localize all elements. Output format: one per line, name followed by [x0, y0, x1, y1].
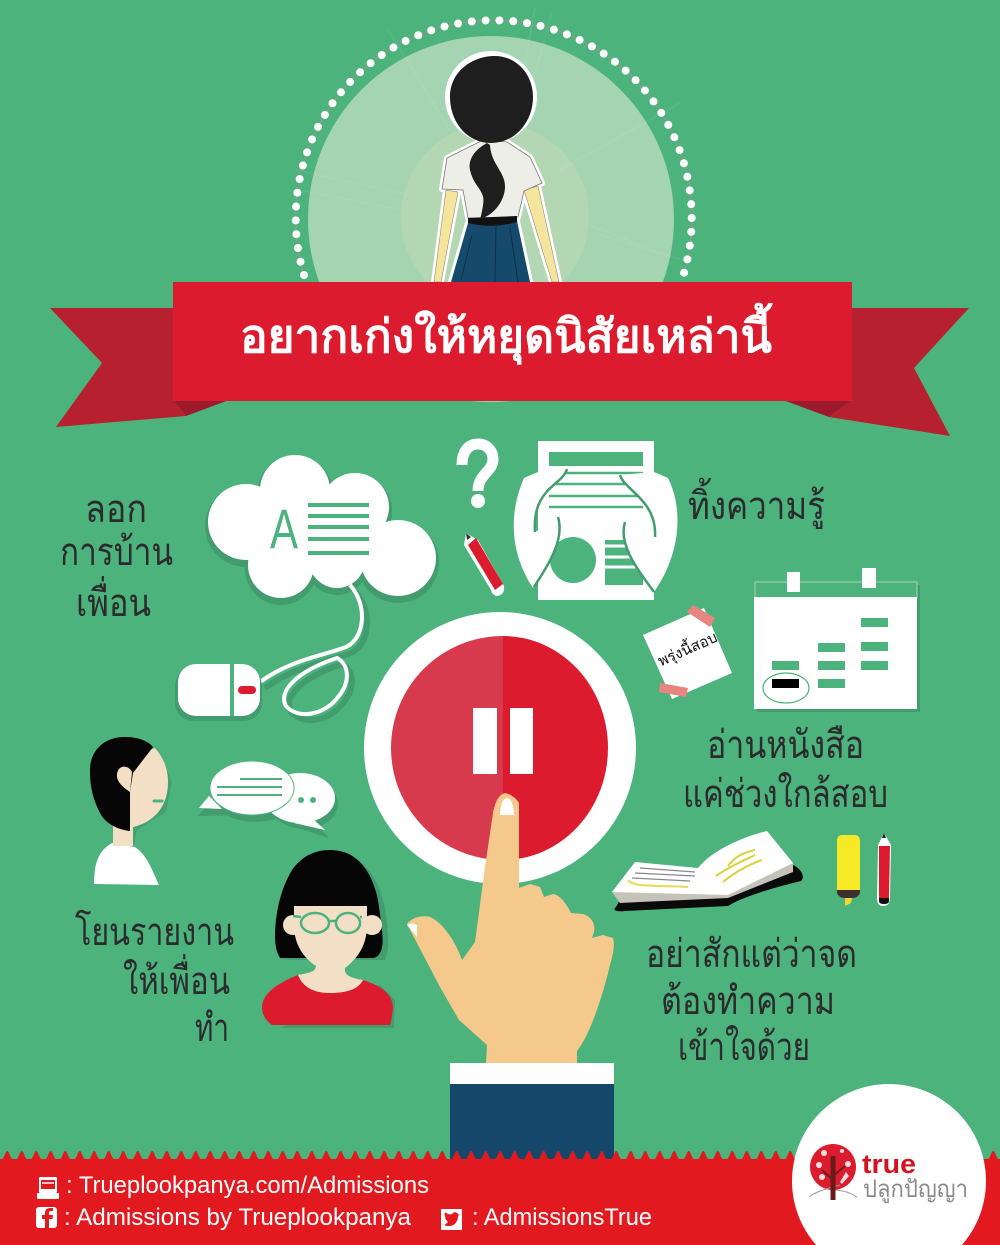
- icon: open book: [612, 831, 803, 911]
- habit text: copying homework: การบ้าน: [60, 531, 173, 574]
- scalloped edge: [0, 1151, 1000, 1160]
- cloud: [208, 455, 436, 602]
- icon: girl with glasses: [262, 850, 395, 1028]
- logo wordmark true: true: [862, 1149, 916, 1179]
- twitter text: : AdmissionsTrue: [472, 1204, 652, 1231]
- habit text: copying homework: [60, 488, 173, 625]
- computer mouse: [175, 664, 262, 721]
- spotlight circles: [295, 8, 690, 402]
- icon: cloud and mouse: [175, 455, 436, 721]
- title text: อยากเก่งให้หยุดนิสัยเหล่านี้: [240, 302, 773, 365]
- sleeve: [450, 1084, 614, 1160]
- icon: highlighter: [837, 835, 860, 906]
- left hand: [514, 469, 567, 588]
- cuff: [450, 1063, 614, 1084]
- icon: boy: [90, 737, 172, 885]
- habit text: understand not just notes: เข้าใจด้วย: [678, 1025, 810, 1069]
- habit text: discarding knowledge: ทิ้งความรู้: [688, 477, 825, 529]
- icon: sticky note: [643, 605, 732, 699]
- red band: [0, 1159, 1000, 1245]
- hand: [407, 793, 614, 1063]
- right hand: [620, 472, 677, 592]
- icon: calendar: [754, 568, 920, 712]
- hand pressing button: [407, 793, 614, 1160]
- icon: laptop: [37, 1177, 59, 1199]
- icon: twitter: [441, 1209, 462, 1230]
- icon: facebook: [36, 1207, 57, 1228]
- title ribbon: [50, 282, 969, 436]
- habit text: passing reports to friends: [75, 910, 234, 1050]
- icon: exam paper and hands: [514, 441, 677, 600]
- student figure: [434, 51, 559, 282]
- dotted halo: [296, 20, 692, 275]
- cloud: A: [270, 497, 298, 560]
- pause button: [364, 612, 636, 884]
- habit text: last minute reading: [683, 724, 888, 816]
- habit text: understand not just notes: อย่าสักแต่ว่าจด: [646, 933, 857, 976]
- illustration: student in spotlight: [295, 8, 692, 402]
- icon: sticky note: พรุ่งนี้สอบ: [654, 626, 721, 671]
- mouse cord: [260, 585, 367, 720]
- habit text: passing reports to friends: ให้เพื่อน: [123, 954, 230, 1003]
- website text: : Trueplookpanya.com/Admissions: [66, 1172, 429, 1199]
- habit text: understand not just notes: ต้องทำความ: [661, 980, 835, 1023]
- facebook text: : Admissions by Trueplookpanya: [64, 1204, 412, 1231]
- icon: pencil: [464, 533, 504, 596]
- habit text: understand not just notes: [646, 933, 857, 1069]
- icon: question mark: [462, 444, 493, 508]
- logo wordmark thai: ปลูกปัญญา: [863, 1176, 968, 1204]
- footer band: [0, 1151, 1000, 1245]
- habit text: copying homework: ลอก: [85, 488, 147, 531]
- logo tree: [810, 1144, 857, 1200]
- habit text: copying homework: เพื่อน: [76, 576, 151, 625]
- icon: red pencil: [877, 833, 891, 906]
- habit text: passing reports to friends: ทำ: [195, 1007, 229, 1050]
- habit text: passing reports to friends: โยนรายงาน: [75, 910, 234, 954]
- logo: True Plookpanya: [792, 1084, 986, 1245]
- ribbon tails: [50, 308, 969, 436]
- pause symbol: [473, 708, 533, 774]
- ribbon band: [173, 282, 852, 401]
- habit text: last minute reading: อ่านหนังสือ: [707, 724, 864, 767]
- icon: speech bubbles: [197, 761, 338, 838]
- habit text: last minute reading: แค่ช่วงใกล้สอบ: [683, 772, 888, 816]
